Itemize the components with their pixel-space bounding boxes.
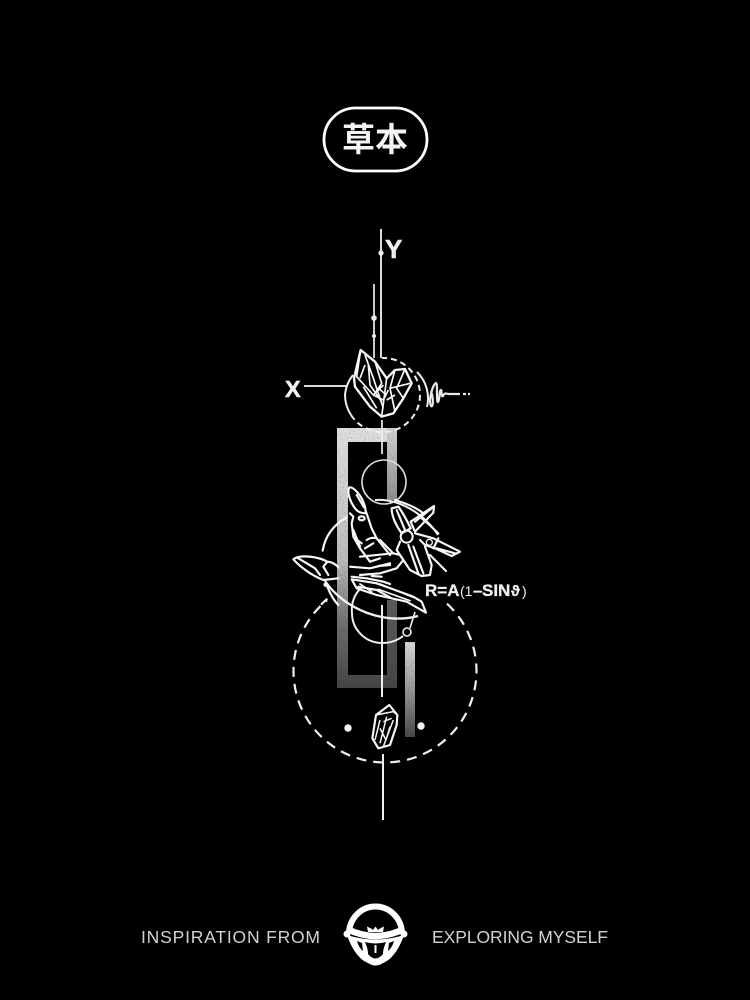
hand left part xyxy=(293,487,390,605)
dashed orbit around top crystal xyxy=(345,358,428,432)
small crystal xyxy=(372,705,397,748)
polar formula: R=A xyxy=(425,581,459,600)
Y axis with label xyxy=(378,229,402,358)
diagram xyxy=(285,229,527,820)
Y axis with label: Y xyxy=(385,234,402,264)
title badge xyxy=(324,108,427,171)
polar formula: ) xyxy=(522,583,527,599)
center axis lower xyxy=(382,754,384,820)
polar formula: ϑ xyxy=(511,583,520,600)
footer left text: INSPIRATION FROM xyxy=(141,927,320,947)
polar formula xyxy=(425,581,527,600)
lower crystal blade xyxy=(352,579,426,613)
footer logo xyxy=(344,906,408,966)
polar formula: (1 xyxy=(460,583,473,599)
gradient bar xyxy=(405,642,415,737)
small circle xyxy=(362,460,406,504)
large dashed circle xyxy=(293,600,476,762)
secondary vertical line xyxy=(371,284,377,358)
footer right text: EXPLORING MYSELF xyxy=(432,927,608,947)
center axis middle xyxy=(381,605,383,697)
X axis with label: X xyxy=(285,376,301,402)
hand right part xyxy=(360,500,460,576)
hand with crystal fingers xyxy=(293,487,460,613)
right dot xyxy=(417,722,425,730)
left dot xyxy=(344,724,352,732)
top crystal xyxy=(354,350,412,417)
X axis with label xyxy=(285,376,347,402)
tall gradient frame xyxy=(337,428,397,688)
polar formula: SIN xyxy=(482,581,510,600)
polar formula: – xyxy=(473,581,482,600)
title badge: 草本 xyxy=(342,121,408,158)
wave signal xyxy=(430,383,470,406)
mid orbit arcs xyxy=(325,500,438,643)
center axis upper xyxy=(381,420,383,454)
